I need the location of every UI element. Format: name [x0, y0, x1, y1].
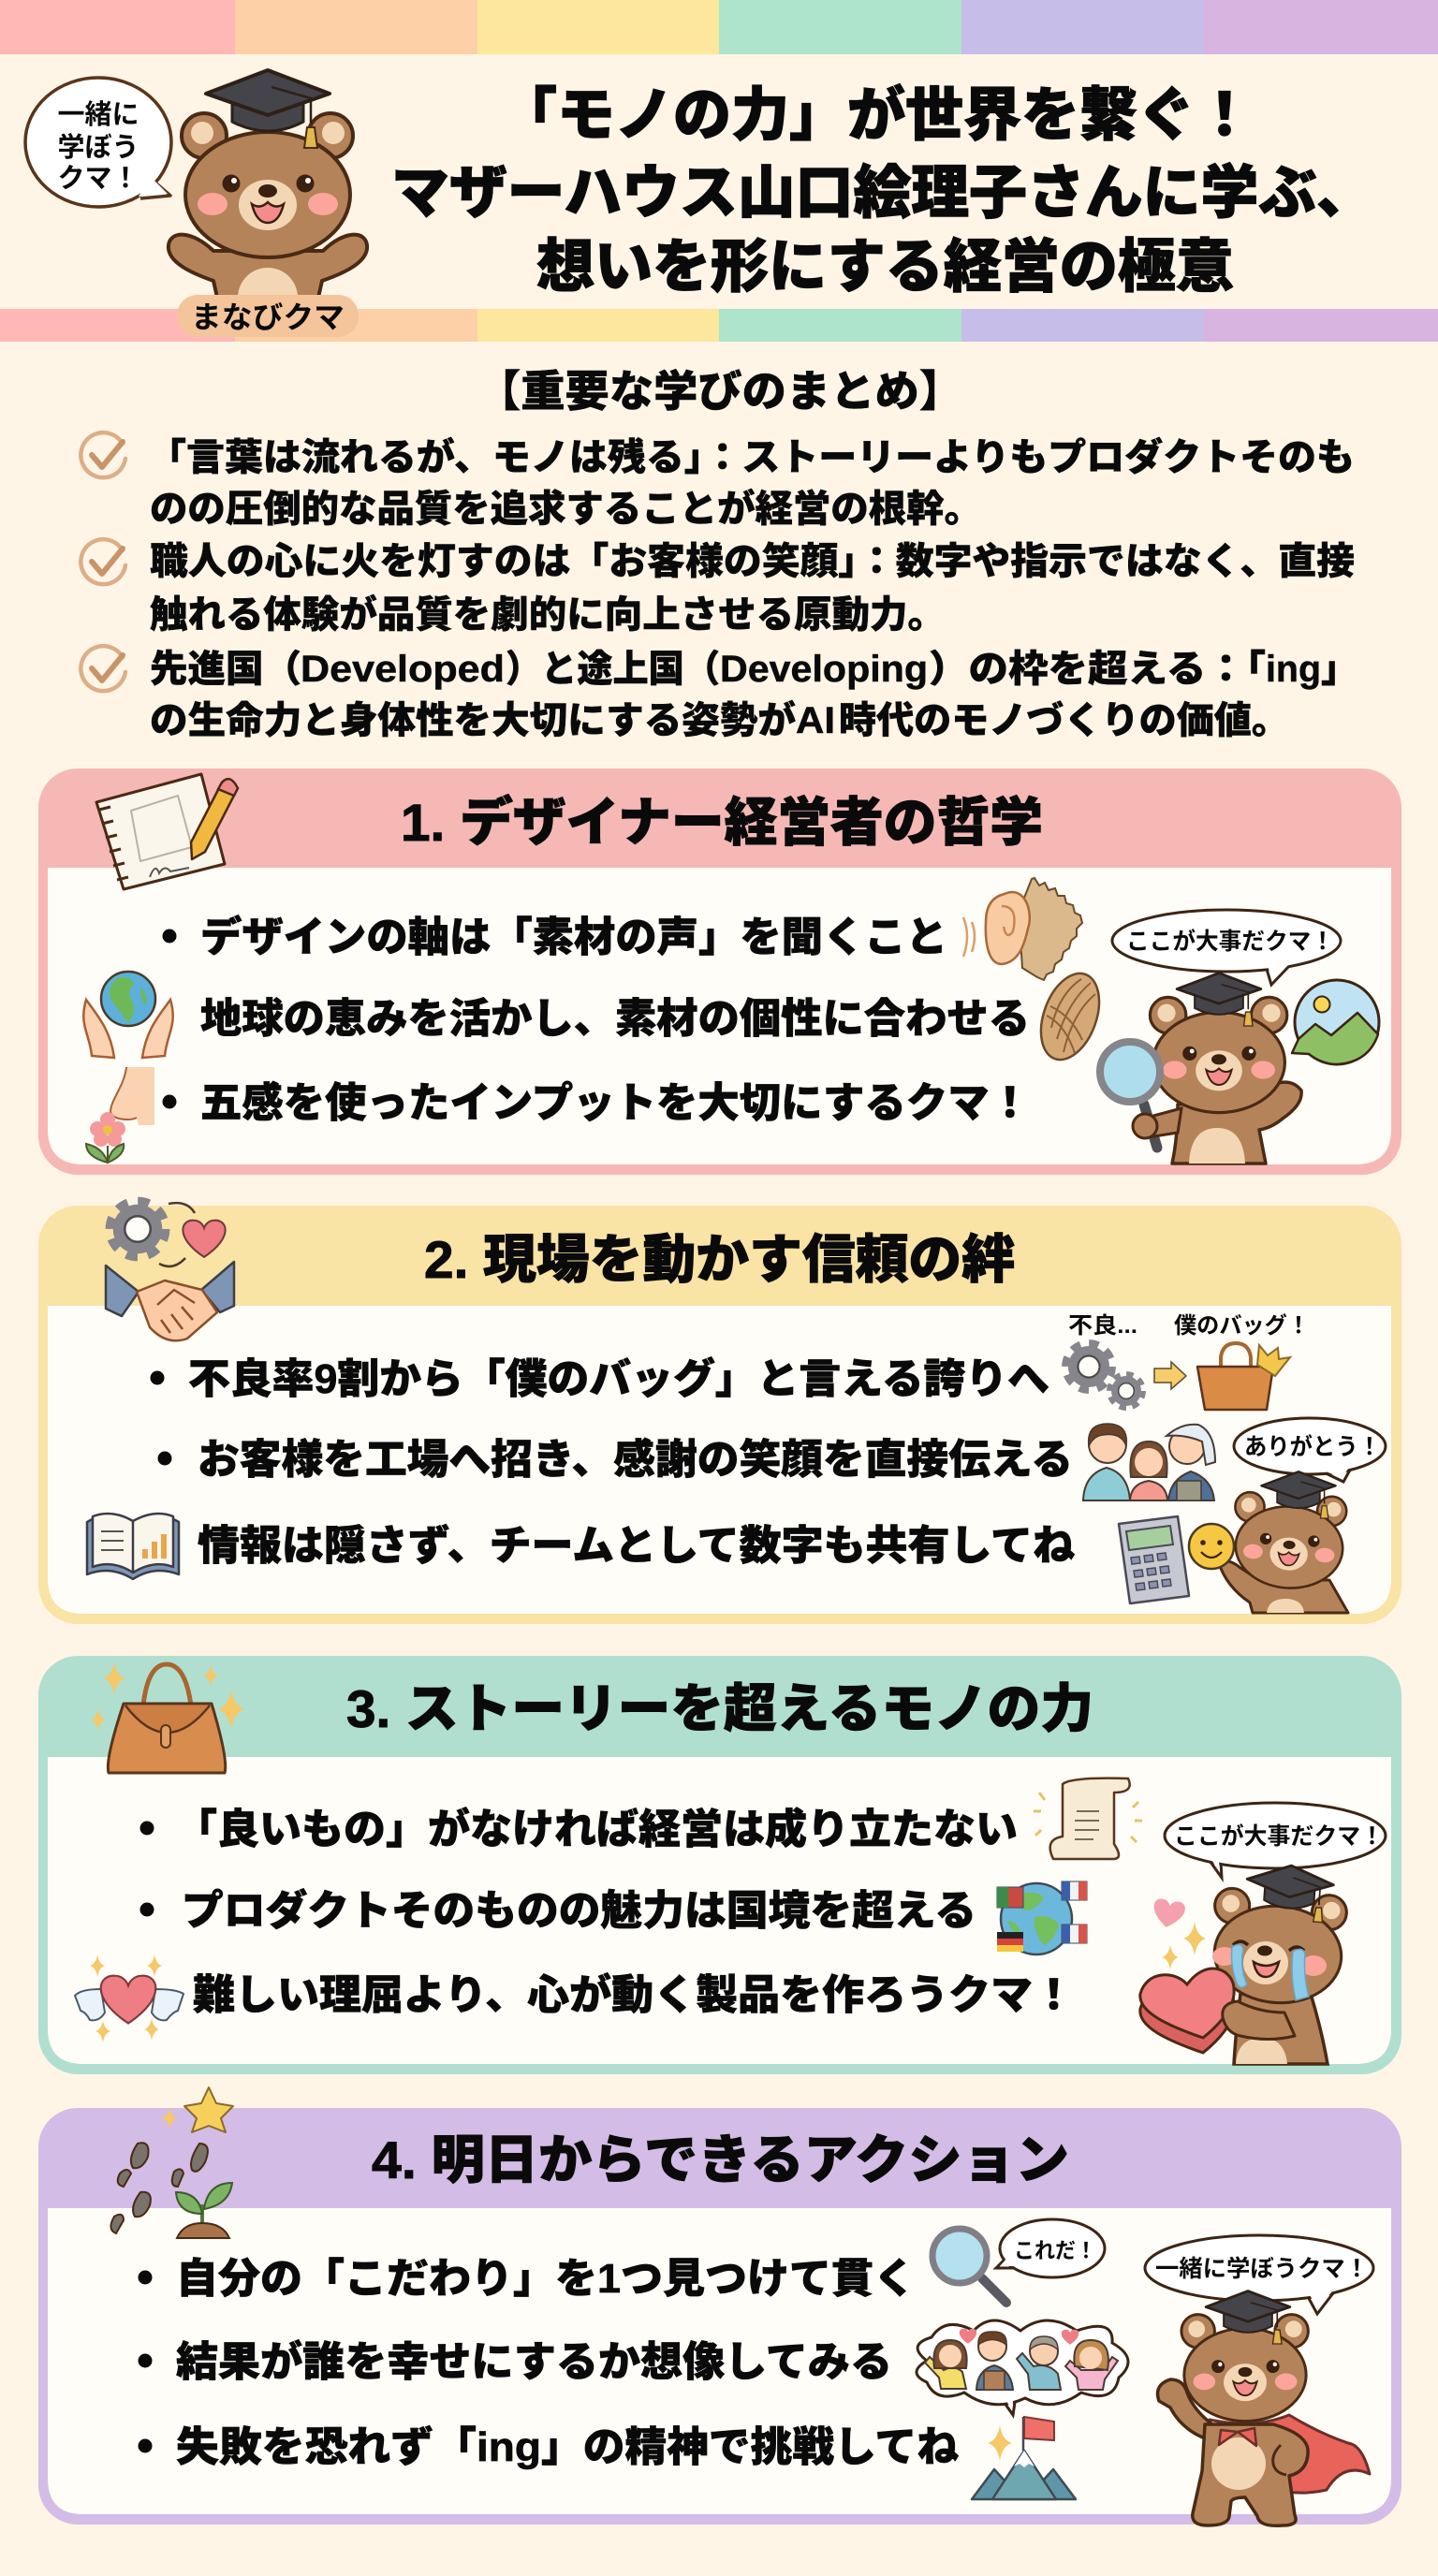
mascot: crying bear with heart [1140, 1863, 1348, 2064]
summary item 3: ）と途上国（ [506, 649, 720, 690]
bullet list 1: 地球の恵みを活かし、素材の個性に合わせる [200, 996, 1030, 1042]
thought cloud: happy people [917, 2320, 1128, 2415]
bullet list 4: 結果が誰を幸せにするか想像してみる [176, 2338, 892, 2385]
heading 2: 2. 現場を動かす信頼の絆 [424, 1230, 1015, 1289]
icon: landscape thought bubble [1292, 980, 1379, 1064]
summary item 1: 「言葉は流れるが、モノは残る」：ストーリーよりもプロダクトそのも [148, 436, 1355, 478]
icon: mountain and flag [972, 2417, 1076, 2499]
bubble: ここが大事だクマ: ここが大事だクマ！ [1126, 928, 1334, 955]
icon: yarn [1030, 965, 1110, 1068]
icon: check 1 [81, 432, 125, 477]
summary item 3: の生命力と身体性を大切にする姿勢が [150, 699, 796, 741]
panel 4: tomorrow's actions [38, 2087, 1401, 2525]
icon: three people [1083, 1424, 1215, 1500]
bubble: ありがとう [1234, 1418, 1386, 1482]
summary item 3: 」 [1321, 649, 1358, 690]
summary heading: 【重要な学びのまとめ】 [477, 367, 963, 416]
icon: ear and fabric [963, 878, 1082, 980]
mascot: bear with magnifier [1100, 973, 1301, 1164]
title: マザーハウス山口絵理子さんに学ぶ、 [391, 161, 1374, 226]
icon: calculator [1119, 1516, 1189, 1603]
summary item 1 [148, 436, 1355, 530]
icon: nose and flower [86, 1067, 154, 1163]
speech bubble: 一緒に学ぼうクマ: 学ぼう [57, 132, 139, 163]
summary item 3: Developed [301, 649, 505, 690]
icon: globe in hands [83, 972, 173, 1058]
summary item 3 [150, 649, 1358, 741]
captions: before and after [1068, 1312, 1310, 1339]
bullet list 4 [139, 2256, 959, 2470]
summary item 2 [150, 541, 1355, 636]
bubble: ここが大事だクマ 2 [1165, 1803, 1386, 1878]
summary item 1: のの圧倒的な品質を追求することが経営の根幹。 [150, 488, 982, 530]
bullet list 2: お客様を工場へ招き、感謝の笑顔を直接伝える [198, 1437, 1073, 1483]
title: 想いを形にする経営の極意 [536, 235, 1234, 300]
bullet list 3: プロダクトそのものの魅力は国境を超える [182, 1887, 976, 1934]
bullet list 2: 不良率9割から「僕のバッグ」と言える誇りへ [188, 1355, 1049, 1402]
bullet list 2 [150, 1355, 1075, 1569]
summary item 3: 時代のモノづくりの価値。 [839, 700, 1289, 741]
icon: magnifier [932, 2229, 1006, 2303]
summary item 3: 先進国（ [150, 649, 301, 690]
bubble: 一緒に学ぼうクマ: 一緒に学ぼうクマ！ [1155, 2256, 1369, 2282]
heading 4: 4. 明日からできるアクション [372, 2130, 1069, 2189]
icon: gear heart handshake [106, 1201, 234, 1340]
icon: winged heart [75, 1954, 183, 2042]
bubble: これだ [996, 2219, 1105, 2277]
heading 1: 1. デザイナー経営者の哲学 [401, 793, 1043, 852]
mascot: bear with coin [1189, 1471, 1348, 1613]
lower rainbow band [0, 309, 1438, 342]
bullet list 4: 」の精神で挑戦してね [541, 2424, 959, 2470]
icon: globe with flags [997, 1881, 1087, 1954]
bubble: ここが大事だクマ [1112, 910, 1341, 985]
captions: before and after: 僕のバッグ！ [1174, 1312, 1310, 1339]
bullet list 3: 「良いもの」がなければ経営は成り立たない [175, 1806, 1018, 1852]
icon: leather bag [91, 1661, 244, 1773]
panel 3: power of things [38, 1656, 1401, 2074]
bubble: 一緒に学ぼうクマ [1145, 2235, 1373, 2314]
captions: before and after: 不良... [1068, 1313, 1137, 1339]
speech bubble: 一緒に学ぼうクマ: 一緒に [57, 99, 139, 130]
bullet list 4: 自分の「こだわり」を1つ見つけて貫く [176, 2256, 916, 2302]
summary item 2: 触れる体験が品質を劇的に向上させる原動力。 [150, 593, 946, 636]
icon: scroll [1034, 1778, 1142, 1859]
bullet list 4: ing [477, 2424, 541, 2470]
icon: smiley coin [1189, 1524, 1234, 1569]
heading 3: 3. ストーリーを超えるモノの力 [346, 1679, 1093, 1738]
icon: notebook and pencil [96, 774, 238, 889]
icon: star footprints sprout [110, 2087, 233, 2238]
bullet list 1 [163, 914, 1031, 1126]
bullet list 3 [140, 1806, 1075, 2018]
name tag: まなびクマ [177, 295, 359, 337]
summary item 3: AI [796, 700, 835, 741]
bullet list 1: デザインの軸は「素材の声」を聞くこと [200, 914, 947, 960]
speech bubble: 一緒に学ぼうクマ [25, 78, 171, 207]
title: 「モノの力」が世界を繋ぐ！ [499, 82, 1254, 148]
panel 1: designer philosophy [38, 768, 1401, 1175]
mascot: superhero bear [1157, 2291, 1370, 2525]
icon: open book chart [87, 1514, 179, 1579]
summary item 3: ing [1266, 649, 1321, 690]
name tag: まなびクマ: まなびクマ [191, 300, 345, 334]
bullet list 1: 五感を使ったインプットを大切にするクマ！ [200, 1080, 1031, 1126]
title [391, 82, 1374, 300]
bullet list 3: 難しい理屈より、心が動く製品を作ろうクマ！ [193, 1971, 1075, 2018]
speech bubble: 一緒に学ぼうクマ: クマ！ [57, 164, 139, 194]
icon: gears to bag [1065, 1343, 1290, 1410]
panel 2: trust [38, 1201, 1401, 1624]
icon: check 3 [81, 646, 125, 691]
bullet list 4: 失敗を恐れず「 [176, 2424, 477, 2470]
summary list [81, 432, 1358, 741]
mascot bear: header [169, 70, 367, 328]
icon: check 2 [81, 539, 125, 584]
top rainbow band [0, 0, 1438, 54]
bubble: ここが大事だクマ 2: ここが大事だクマ！ [1174, 1822, 1384, 1850]
summary item 3: ）の枠を超える：「 [929, 649, 1266, 690]
bubble: ありがとう: ありがとう！ [1244, 1433, 1381, 1460]
bullet list 2: 情報は隠さず、チームとして数字も共有してね [198, 1523, 1075, 1569]
summary item 3: Developing [720, 649, 928, 690]
bubble: これだ: これだ！ [1014, 2238, 1096, 2262]
summary item 2: 職人の心に火を灯すのは「お客様の笑顔」：数字や指示ではなく、直接 [150, 541, 1355, 582]
